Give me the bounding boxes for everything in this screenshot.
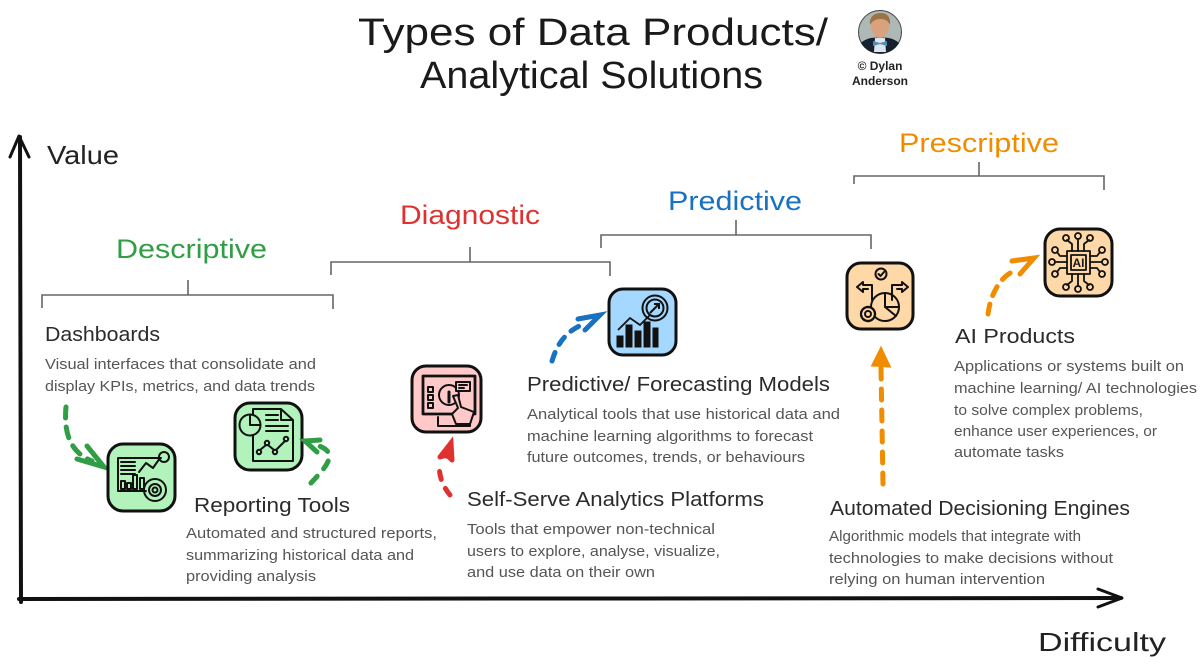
reporting tools text: providing analysis	[186, 568, 316, 585]
decisioning engines text	[829, 498, 1130, 588]
predictive models text	[527, 374, 840, 466]
AI products text: Applications or systems built on	[954, 358, 1184, 375]
self-serve analytics text: users to explore, analyse, visualize,	[467, 543, 720, 560]
AI products text: machine learning/ AI technologies	[954, 380, 1197, 397]
dashboards text: Visual interfaces that consolidate and	[45, 356, 316, 373]
difficulty axis	[19, 589, 1122, 607]
icon: AI products: AI	[1072, 256, 1084, 270]
predictive models text: future outcomes, trends, or behaviours	[527, 449, 805, 466]
arrow: dashboards	[66, 407, 104, 467]
decisioning engines text: relying on human intervention	[829, 571, 1045, 588]
title: Types of Data Products/	[358, 12, 829, 54]
category: predictive	[601, 186, 871, 249]
decisioning engines text: Automated Decisioning Engines	[830, 498, 1130, 520]
dashboards text: Dashboards	[45, 324, 160, 346]
arrow: decisioning engines	[873, 349, 889, 484]
icon: predictive models	[609, 289, 676, 355]
author credit: Anderson	[852, 74, 908, 88]
AI products text: AI Products	[955, 326, 1075, 348]
icon: decisioning engines	[847, 263, 913, 329]
AI products text: to solve complex problems,	[954, 402, 1143, 419]
icon: self-serve analytics	[412, 366, 481, 432]
decisioning engines text: technologies to make decisions without	[829, 550, 1114, 567]
reporting tools text: Automated and structured reports,	[186, 525, 437, 542]
reporting tools text: summarizing historical data and	[186, 547, 414, 564]
AI products text: enhance user experiences, or	[954, 423, 1157, 440]
category: prescriptive	[854, 128, 1104, 190]
self-serve analytics text	[467, 489, 764, 581]
title: Analytical Solutions	[420, 55, 763, 97]
category: diagnostic	[331, 200, 610, 276]
AI products text	[954, 326, 1197, 461]
predictive models text: Predictive/ Forecasting Models	[527, 374, 830, 396]
decisioning engines text: Algorithmic models that integrate with	[829, 528, 1081, 545]
icon: dashboards	[108, 444, 175, 511]
reporting tools text	[186, 495, 437, 585]
predictive models text: machine learning algorithms to forecast	[527, 428, 814, 445]
AI products text: automate tasks	[954, 444, 1064, 461]
arrow: AI products	[988, 258, 1034, 314]
title	[358, 12, 829, 97]
category: predictive: Predictive	[668, 186, 802, 216]
author portrait	[858, 10, 902, 54]
value axis	[10, 136, 29, 602]
arrow: reporting tools	[305, 440, 329, 483]
value axis label: Value	[47, 140, 119, 170]
category: descriptive: Descriptive	[116, 234, 267, 264]
author credit	[852, 59, 908, 88]
author credit: © Dylan	[858, 59, 902, 73]
predictive models text: Analytical tools that use historical data and	[527, 406, 840, 423]
dashboards text: display KPIs, metrics, and data trends	[45, 378, 315, 395]
category: prescriptive: Prescriptive	[899, 128, 1059, 158]
self-serve analytics text: Tools that empower non-technical	[467, 521, 715, 538]
category: diagnostic: Diagnostic	[400, 200, 540, 230]
category: descriptive	[42, 234, 333, 309]
dashboards text	[45, 324, 316, 395]
self-serve analytics text: Self-Serve Analytics Platforms	[467, 489, 764, 511]
arrow: predictive models	[552, 315, 600, 361]
icon: AI products	[1045, 229, 1112, 296]
reporting tools text: Reporting Tools	[194, 495, 350, 517]
arrow: self-serve analytics	[439, 443, 452, 495]
difficulty axis label: Difficulty	[1038, 627, 1166, 657]
self-serve analytics text: and use data on their own	[467, 564, 655, 581]
icon: reporting tools	[235, 403, 302, 470]
